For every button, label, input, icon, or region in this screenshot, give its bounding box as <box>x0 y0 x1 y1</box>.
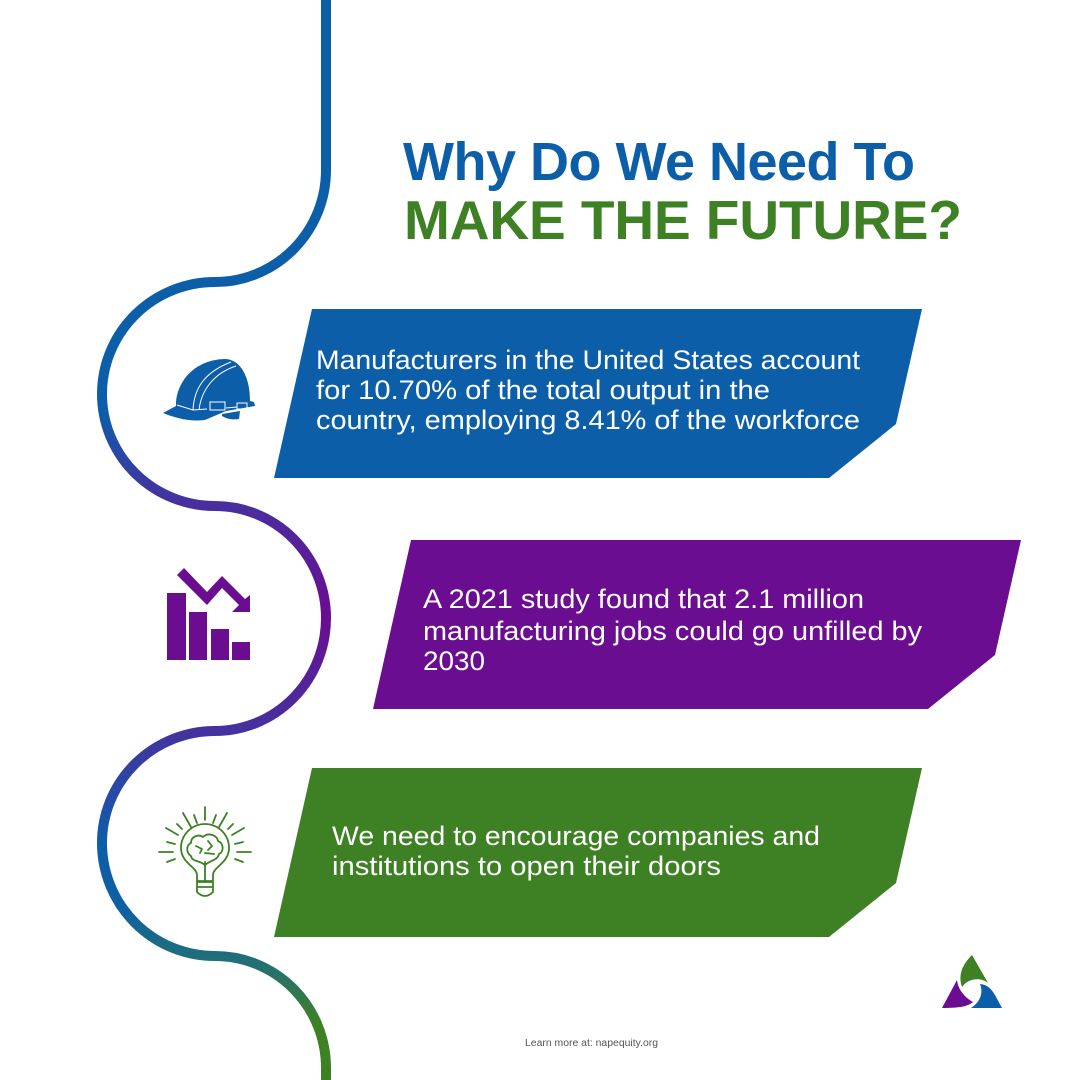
logo: tricolor triangle <box>942 955 1002 1008</box>
panel text: output statistic: for 10.70% of the total output in the <box>316 375 770 405</box>
winding path line <box>102 0 326 1080</box>
panel text: jobs statistic: 2030 <box>423 646 485 676</box>
panel: manufacturing output <box>274 309 922 478</box>
panel text: output statistic: country, employing 8.41% of the workforce <box>316 405 860 435</box>
panel text: jobs statistic <box>423 584 923 676</box>
panel text: call to action <box>332 821 820 881</box>
panel text: jobs statistic: manufacturing jobs could go unfilled by <box>423 616 923 646</box>
panel text: output statistic: Manufacturers in the United States account <box>316 345 861 375</box>
icon: hard hat <box>163 359 255 421</box>
title <box>403 132 962 251</box>
panel text: jobs statistic: A 2021 study found that 2.1 million <box>423 584 864 614</box>
icon: declining bar chart <box>167 568 250 660</box>
title: Why Do We Need To <box>403 132 915 192</box>
title: MAKE THE FUTURE? <box>404 189 962 251</box>
panel: call to action <box>274 768 922 937</box>
panel text: call to action: We need to encourage companies and <box>332 821 820 851</box>
footer link: Learn more at: napequity.org <box>525 1038 658 1049</box>
icon: light bulb with brain <box>159 807 251 896</box>
panel: unfilled jobs <box>373 540 1021 709</box>
panel text: output statistic <box>316 345 861 435</box>
panel text: call to action: institutions to open their doors <box>332 851 721 881</box>
